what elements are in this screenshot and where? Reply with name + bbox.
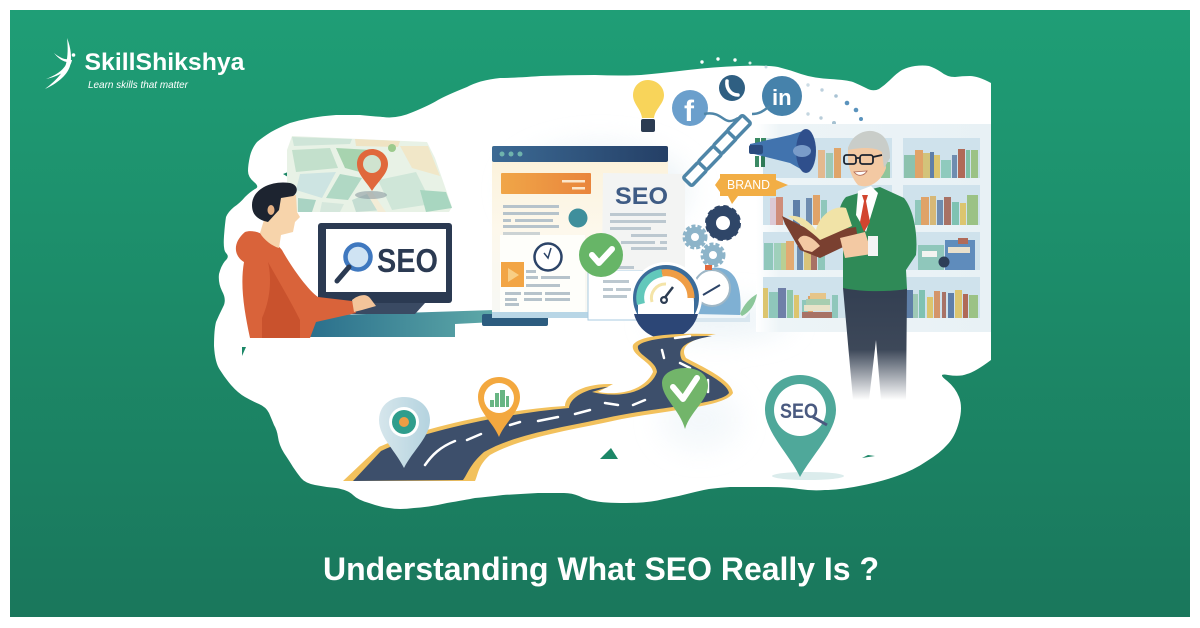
- logo tagline: Learn skills that matter: [88, 79, 188, 91]
- hands: [798, 236, 820, 252]
- older man reading a book: [782, 131, 916, 400]
- speed gauge icon: [630, 262, 702, 339]
- orange banner: [501, 173, 591, 194]
- BRAND tag: [715, 174, 788, 204]
- monitor showing SEO: [318, 223, 452, 314]
- pin: SEO: SEO: [780, 400, 818, 423]
- head: [848, 137, 886, 186]
- person at computer: [236, 182, 495, 338]
- social icons and chain link: [672, 75, 802, 186]
- shelf compartments: [763, 138, 980, 318]
- pin: chart: [478, 377, 520, 437]
- glasses: [844, 155, 882, 164]
- books row 1: [818, 148, 978, 178]
- gears icons: [684, 207, 739, 266]
- light bulb icon: [633, 80, 664, 132]
- trousers: [843, 288, 907, 400]
- icon: play button: [501, 262, 524, 287]
- browser window with SEO pages: [482, 146, 692, 326]
- open book: [782, 207, 858, 258]
- desk: [308, 310, 495, 337]
- shirt and tie: [856, 186, 878, 232]
- pin: SEO: [765, 375, 844, 480]
- icon: phone: [719, 75, 745, 101]
- pin: target: [379, 397, 430, 468]
- road lane markings: [425, 336, 708, 465]
- pin: green check: [662, 368, 708, 429]
- title: Understanding What SEO Really Is ?: [323, 551, 879, 587]
- lower white panels: [500, 235, 585, 312]
- icon: clock: [534, 244, 562, 270]
- white cloud backdrop: [214, 66, 991, 509]
- teal dot: [568, 208, 588, 228]
- decorative dotted arc: [700, 57, 867, 132]
- BRAND tag: BRAND: [727, 177, 770, 192]
- smile: [854, 171, 867, 175]
- text lines left column: [503, 205, 570, 306]
- grey hair: [848, 131, 890, 168]
- stopwatch icon: [690, 265, 757, 322]
- icon: magnifying glass: [337, 244, 370, 281]
- icon: light gear lower: [702, 244, 724, 266]
- icon: light gear: [684, 226, 706, 248]
- browser title bar: [492, 146, 668, 162]
- logo wordmark: SkillShikshya: [84, 49, 245, 76]
- green jacket: [836, 187, 916, 291]
- books row 3: [764, 238, 975, 270]
- man in orange hoodie: [236, 182, 376, 338]
- icon: facebook: f: [684, 95, 695, 128]
- SEO page: SEO: [615, 183, 668, 210]
- books row 4: [763, 288, 978, 318]
- icon: navy gear: [707, 207, 739, 239]
- bookshelf: [756, 124, 991, 332]
- icon: orange location pin: [355, 149, 388, 199]
- icon: linkedin: in: [772, 85, 792, 110]
- logo mark: swoosh figure: [45, 38, 75, 89]
- monitor SEO text: SEO: [377, 242, 438, 279]
- logo: [45, 38, 245, 91]
- books row 2: [770, 195, 978, 225]
- icon: green check badge: [579, 233, 623, 277]
- map illustration: [287, 136, 452, 212]
- megaphone icon: [749, 129, 816, 173]
- SEO page: [602, 173, 685, 298]
- winding road: [343, 334, 733, 481]
- icon: chain link: [683, 115, 751, 186]
- soft mist shading behind illustration: [510, 145, 790, 450]
- small green gaps in the cloud: [242, 172, 875, 459]
